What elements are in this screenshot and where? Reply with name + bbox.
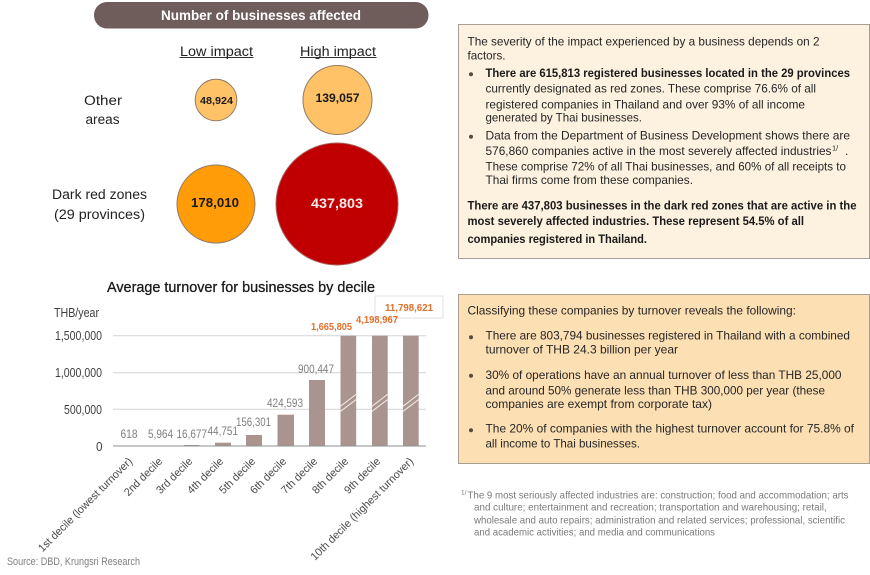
- intro text: The severity of the impact experienced by a business depends on 2: [468, 35, 820, 49]
- x axis labels: 3rd decile: [154, 456, 195, 497]
- bubble: dark red zones low impact: 178,010: [191, 195, 239, 210]
- bubble: other areas low impact: 48,924: [200, 95, 233, 107]
- bullet: top 20 percent: all income to Thai businesses.: [486, 436, 640, 450]
- bullet: severely affected industries: 576,860 companies active in the most severely affected industries: [486, 144, 832, 158]
- bullet: registered businesses in red zones: currently designated as red zones. These comprise 76.6% of all: [486, 82, 816, 96]
- bullet: top 20 percent: The 20% of companies with the highest turnover account for 75.8% of: [486, 422, 855, 436]
- key finding: [468, 198, 857, 246]
- bullet: top 20 percent: [469, 422, 855, 450]
- bullet: low-turnover operations: [469, 368, 842, 411]
- source note: Source: DBD, Krungsri Research: [7, 556, 140, 568]
- key finding: companies registered in Thailand.: [468, 232, 647, 246]
- bullet: registered businesses in red zones: There are 615,813 registered businesses located in the 29 provinces: [486, 66, 850, 80]
- bubble: other areas high impact: [303, 66, 372, 134]
- intro text: factors.: [468, 48, 506, 62]
- x axis labels: 7th decile: [279, 456, 320, 497]
- bullet: low-turnover operations: 30% of operations have an annual turnover of less than THB 25,000: [486, 368, 842, 382]
- bullet: combined turnover: There are 803,794 businesses registered in Thailand with a combined: [486, 328, 850, 342]
- footnote: The 9 most seriously affected industries are: construction; food and accommodation; arts: [468, 489, 848, 501]
- x axis labels: [36, 456, 416, 563]
- bubble: dark red zones low impact: [177, 165, 255, 243]
- y axis labels: 0: [96, 440, 103, 454]
- y axis labels: [55, 329, 103, 454]
- row label: dark red zones: Dark red zones: [52, 187, 147, 202]
- data labels: 424,593: [267, 398, 303, 410]
- key finding: There are 437,803 businesses in the dark red zones that are active in the: [468, 198, 857, 212]
- footnote: 1/: [461, 490, 467, 496]
- row label: dark red zones: (29 provinces): [54, 207, 145, 222]
- panel: severity of impact: [458, 24, 870, 258]
- chart title: Average turnover for businesses by decile: [107, 280, 375, 296]
- axis break marks: [340, 394, 419, 412]
- bar chart: average turnover by decile: [36, 296, 443, 563]
- data labels: 156,301: [236, 417, 271, 429]
- x axis labels: 1st decile (lowest turnover): [36, 456, 135, 555]
- data labels: 4,198,967: [356, 314, 398, 326]
- heading: number of businesses affected: Number of businesses affected: [161, 7, 361, 23]
- bullet: combined turnover: turnover of THB 24.3 billion per year: [486, 343, 678, 357]
- footnote: and culture; entertainment and recreation; transportation and warehousing; retail,: [474, 502, 827, 514]
- bubble: dark red zones high impact: 437,803: [311, 195, 363, 211]
- row label: other areas: areas: [86, 112, 120, 127]
- key finding: most severely affected industries. These represent 54.5% of all: [468, 214, 804, 228]
- column heading: low impact: Low impact: [180, 44, 253, 59]
- y axis labels: 1,500,000: [55, 329, 102, 343]
- data labels: [120, 314, 398, 441]
- bars: [184, 336, 419, 446]
- x axis labels: 10th decile (highest turnover): [309, 456, 416, 563]
- bullet: registered businesses in red zones: [469, 66, 850, 125]
- row label: other areas: [84, 93, 123, 127]
- column heading: high impact: High impact: [300, 44, 376, 59]
- y axis unit: THB/year: [54, 306, 99, 320]
- panel: classification by turnover: [458, 294, 870, 464]
- bubble: other areas high impact: 139,057: [316, 93, 360, 105]
- panel intro: Classifying these companies by turnover reveals the following:: [468, 303, 796, 317]
- data labels: 16,677: [176, 429, 207, 441]
- data labels: 5,964: [148, 429, 174, 441]
- callout: highest decile value: 11,798,621: [385, 302, 433, 314]
- intro text: [468, 35, 820, 62]
- footnote: [461, 489, 848, 539]
- data labels: 44,751: [208, 426, 238, 438]
- bullet: severely affected industries: These comprise 72% of all Thai businesses, and 60% of all receipts to: [486, 160, 846, 174]
- y axis labels: 500,000: [64, 403, 102, 417]
- x axis labels: 8th decile: [310, 456, 351, 497]
- bullet: severely affected industries: .: [845, 144, 848, 158]
- bullet: low-turnover operations: companies are exempt from corporate tax): [486, 397, 712, 411]
- row label: dark red zones: [52, 187, 147, 222]
- x axis labels: 4th decile: [185, 456, 226, 497]
- footnote: and academic activities; and media and communications: [474, 527, 715, 539]
- bubble: dark red zones high impact: [276, 143, 398, 265]
- data labels: 900,447: [298, 364, 334, 376]
- bullet: severely affected industries: Data from the Department of Business Development shows there are: [486, 128, 850, 142]
- bullet: severely affected industries: 1/: [832, 144, 839, 152]
- x axis labels: 9th decile: [342, 456, 383, 497]
- data labels: 1,665,805: [311, 321, 352, 333]
- bubble chart: businesses by area and impact: [52, 44, 398, 265]
- x axis labels: 6th decile: [248, 456, 289, 497]
- heading: number of businesses affected: [94, 2, 428, 28]
- x axis labels: 5th decile: [217, 456, 258, 497]
- bullet: registered businesses in red zones: registered companies in Thailand and over 93% of all income: [486, 97, 805, 111]
- bullet: low-turnover operations: and around 50% generate less than THB 300,000 per year (these: [486, 383, 825, 397]
- x axis labels: 2nd decile: [122, 456, 165, 499]
- data labels: 618: [120, 429, 138, 441]
- row label: other areas: Other: [84, 93, 123, 108]
- bullet: combined turnover: [469, 328, 850, 357]
- footnote: wholesale and auto repairs; administration and related services; professional, scientific: [473, 514, 845, 526]
- bullet: severely affected industries: Thai firms come from these companies.: [486, 173, 693, 187]
- y axis labels: 1,000,000: [55, 366, 102, 380]
- bubble: other areas low impact: [195, 79, 237, 121]
- bullet: registered businesses in red zones: generated by Thai businesses.: [486, 111, 642, 125]
- callout: highest decile value: [375, 296, 443, 318]
- bullet: severely affected industries: [469, 128, 850, 187]
